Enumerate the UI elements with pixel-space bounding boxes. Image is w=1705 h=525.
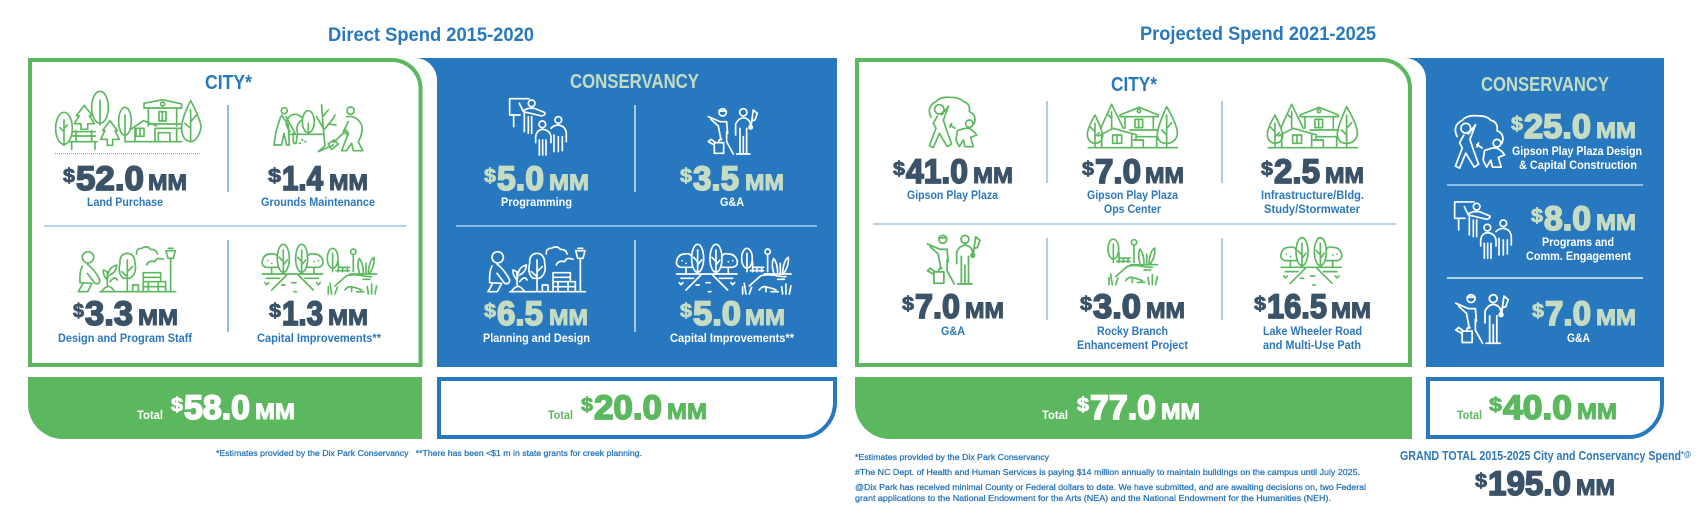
item: G&A bbox=[1456, 295, 1636, 345]
amount bbox=[680, 295, 785, 333]
item: play plaza design: & Capital Construction bbox=[1519, 158, 1637, 172]
footnotes: projected spend bbox=[855, 452, 1366, 503]
total bar: city 77.0: Total bbox=[1042, 408, 1068, 422]
amount: 8.0 bbox=[1544, 200, 1591, 238]
amount: $ bbox=[484, 166, 496, 187]
amount bbox=[484, 295, 588, 333]
amount: MM bbox=[1596, 118, 1636, 143]
amount: 1.3 bbox=[282, 295, 323, 333]
amount: $ bbox=[1254, 294, 1266, 315]
amount bbox=[1532, 295, 1636, 333]
icon: park land with house bbox=[55, 91, 201, 154]
item: G&A: G&A bbox=[720, 195, 744, 209]
icon: house and trees bbox=[1267, 104, 1357, 148]
item: programs and engagement bbox=[1455, 200, 1636, 263]
amount: $ bbox=[268, 166, 282, 187]
amount: MM bbox=[745, 305, 785, 330]
amount: 7.0 bbox=[915, 288, 960, 326]
footnotes: projected spend: @Dix Park has received minimal County or Federal dollars to date. We have submitted, and are awaiting decisions on, two Federal bbox=[855, 482, 1366, 492]
amount: $ bbox=[893, 159, 905, 180]
amount bbox=[484, 160, 589, 198]
total bar: conservancy 40.0 bbox=[1428, 379, 1662, 437]
icon: trees and creek bbox=[676, 244, 791, 294]
panel: direct spend city bbox=[30, 60, 420, 365]
item: planning and design: Planning and Design bbox=[483, 331, 590, 345]
amount: MM bbox=[1145, 163, 1184, 188]
icon: gardener with bench bbox=[488, 247, 585, 292]
item: Ops Center bbox=[1082, 104, 1184, 216]
amount: MM bbox=[138, 305, 178, 330]
amount bbox=[1531, 200, 1636, 238]
item: Lake Wheeler Road bbox=[1254, 238, 1371, 352]
amount: 3.0 bbox=[1093, 288, 1141, 326]
item: infrastructure study: Infrastructure/Bldg. bbox=[1261, 188, 1364, 202]
total bar: city 58.0: MM bbox=[255, 399, 295, 424]
amount bbox=[268, 160, 368, 198]
amount: $ bbox=[484, 301, 496, 322]
icon: teacher and students bbox=[1455, 202, 1511, 258]
total bar: conservancy 20.0: MM bbox=[667, 399, 707, 424]
icon: adult and child bbox=[929, 97, 977, 148]
heading: city: CITY* bbox=[205, 72, 252, 94]
item: infrastructure study bbox=[1261, 104, 1364, 216]
amount: $ bbox=[902, 294, 914, 315]
amount: MM bbox=[329, 170, 368, 195]
item: Rocky Branch: Rocky Branch bbox=[1097, 324, 1168, 338]
icon: two workers bbox=[1456, 295, 1508, 343]
amount: 3.5 bbox=[693, 160, 739, 198]
amount: 7.0 bbox=[1545, 295, 1591, 333]
total bar: city 77.0: MM bbox=[1161, 399, 1200, 424]
icon: two workers bbox=[927, 235, 980, 284]
amount: 16.5 bbox=[1267, 288, 1327, 326]
amount: MM bbox=[965, 298, 1004, 323]
amount: $ bbox=[1531, 206, 1543, 227]
icon: teacher and students bbox=[510, 99, 566, 155]
amount: 41.0 bbox=[906, 153, 968, 191]
icon: trees and creek bbox=[262, 244, 377, 294]
amount: $ bbox=[1261, 159, 1273, 180]
heading: city: CITY* bbox=[1111, 74, 1157, 96]
total bar: conservancy 40.0: $ bbox=[1489, 395, 1503, 416]
item: capital improvements bbox=[257, 244, 381, 345]
grand total: MM bbox=[1576, 475, 1615, 500]
icon: gardener with bench bbox=[78, 247, 176, 292]
total bar: city 58.0: 58.0 bbox=[184, 389, 250, 427]
item: programs and engagement: Comm. Engagement bbox=[1526, 249, 1631, 263]
amount bbox=[269, 295, 368, 333]
amount: $ bbox=[63, 166, 75, 187]
item: capital improvements: Capital Improvements** bbox=[670, 331, 794, 345]
amount bbox=[73, 295, 178, 333]
amount: MM bbox=[1146, 298, 1185, 323]
item: G&A bbox=[680, 109, 784, 209]
footnotes: projected spend: #The NC Dept. of Health and Human Services is paying $14 million annually to maintain buildings on the campus until July 2025. bbox=[855, 467, 1360, 477]
amount: MM bbox=[1331, 298, 1371, 323]
item: Lake Wheeler Road: and Multi-Use Path bbox=[1263, 338, 1361, 352]
total bar: city 77.0 bbox=[855, 377, 1412, 439]
grand total: $ bbox=[1475, 471, 1487, 492]
amount: 5.0 bbox=[693, 295, 741, 333]
total bar: conservancy 20.0: Total bbox=[548, 408, 573, 422]
item: planning and design bbox=[483, 247, 590, 345]
total bar: city 58.0 bbox=[28, 377, 422, 439]
heading: Direct Spend 2015-2020: Direct Spend 2015-2020 bbox=[328, 25, 534, 46]
amount: $ bbox=[680, 166, 692, 187]
item: Ops Center: Ops Center bbox=[1104, 202, 1161, 216]
item: capital improvements bbox=[670, 244, 794, 345]
item: Gipson Play Plaza bbox=[893, 97, 1013, 202]
amount: $ bbox=[1082, 159, 1094, 180]
amount bbox=[1080, 288, 1185, 326]
item: G&A: G&A bbox=[1567, 331, 1590, 345]
icon: creek bbox=[1108, 239, 1157, 285]
total bar: city 58.0: Total bbox=[137, 408, 163, 422]
amount: $ bbox=[269, 301, 281, 322]
item: programming bbox=[484, 99, 589, 209]
heading: conservancy: CONSERVANCY bbox=[1481, 74, 1610, 96]
item: grounds maintenance bbox=[261, 105, 375, 209]
amount: MM bbox=[1596, 305, 1636, 330]
panel: projected spend city bbox=[857, 60, 1410, 365]
amount: 1.4 bbox=[282, 160, 323, 198]
heading: Projected Spend 2021-2025: Projected Spend 2021-2025 bbox=[1140, 24, 1376, 45]
item: capital improvements: Capital Improvements** bbox=[257, 331, 381, 345]
item: Lake Wheeler Road: Lake Wheeler Road bbox=[1263, 324, 1362, 338]
item: programming: Programming bbox=[501, 195, 572, 209]
amount: 7.0 bbox=[1095, 153, 1141, 191]
icon: two workers bbox=[708, 109, 757, 154]
amount bbox=[893, 153, 1013, 191]
item: design and program staff: Design and Program Staff bbox=[58, 331, 193, 345]
amount: MM bbox=[549, 170, 589, 195]
amount bbox=[1261, 153, 1364, 191]
item: programs and engagement: Programs and bbox=[1542, 235, 1614, 249]
total bar: city 58.0: $ bbox=[171, 395, 183, 416]
item: Rocky Branch bbox=[1077, 239, 1188, 352]
amount: MM bbox=[1325, 163, 1364, 188]
total bar: conservancy 20.0: 20.0 bbox=[594, 389, 662, 427]
amount: MM bbox=[328, 305, 368, 330]
total bar: conservancy 40.0: 40.0 bbox=[1503, 389, 1572, 427]
item: play plaza design: Gipson Play Plaza Design bbox=[1512, 144, 1642, 158]
total bar: conservancy 20.0 bbox=[439, 379, 835, 437]
amount: $ bbox=[1511, 114, 1523, 135]
amount: 5.0 bbox=[497, 160, 544, 198]
amount bbox=[1082, 153, 1184, 191]
amount: 2.5 bbox=[1274, 153, 1320, 191]
amount bbox=[680, 160, 784, 198]
footnotes: projected spend: *Estimates provided by the Dix Park Conservancy bbox=[855, 452, 1050, 462]
amount: MM bbox=[549, 305, 588, 330]
amount: MM bbox=[148, 170, 187, 195]
amount: MM bbox=[745, 170, 784, 195]
icon: adult and child bbox=[1455, 116, 1505, 168]
panel: projected spend conservancy bbox=[1405, 58, 1664, 367]
icon: workers planting bbox=[274, 105, 363, 152]
amount: MM bbox=[973, 163, 1013, 188]
amount bbox=[1511, 108, 1636, 146]
total bar: conservancy 40.0: Total bbox=[1457, 408, 1482, 422]
amount: $ bbox=[1532, 301, 1544, 322]
item: play plaza design bbox=[1455, 108, 1642, 172]
item: design and program staff bbox=[58, 247, 193, 345]
total bar: city 77.0: $ bbox=[1077, 395, 1089, 416]
amount: 52.0 bbox=[76, 160, 144, 198]
item: grounds maintenance: Grounds Maintenance bbox=[261, 195, 375, 209]
amount bbox=[902, 288, 1004, 326]
item: G&A bbox=[902, 235, 1004, 338]
grand total: *@ bbox=[1681, 450, 1691, 459]
panel: direct spend conservancy bbox=[415, 58, 837, 367]
icon: house and trees bbox=[1087, 104, 1177, 148]
footnotes: projected spend: grant applications to the National Endowment for the Arts (NEA) and the National Endowment for the Humanities (NEH). bbox=[855, 493, 1331, 503]
total bar: conservancy 40.0: MM bbox=[1577, 399, 1617, 424]
amount: 25.0 bbox=[1524, 108, 1591, 146]
icon: tree-lined road bbox=[1281, 238, 1342, 285]
grand total bbox=[1400, 448, 1691, 503]
amount: $ bbox=[73, 301, 84, 322]
item: land purchase: Land Purchase bbox=[87, 195, 163, 209]
amount bbox=[1254, 288, 1371, 326]
amount: 3.3 bbox=[85, 295, 133, 333]
grand total: 195.0 bbox=[1488, 465, 1571, 503]
item: G&A: G&A bbox=[941, 324, 965, 338]
item: land purchase bbox=[55, 91, 201, 209]
amount bbox=[63, 160, 187, 198]
amount: $ bbox=[680, 301, 692, 322]
total bar: city 77.0: 77.0 bbox=[1090, 389, 1156, 427]
footnote: direct spend: *Estimates provided by the Dix Park Conservancy **There has been <$1 m in state grants for creek planning. bbox=[216, 448, 642, 458]
item: Rocky Branch: Enhancement Project bbox=[1077, 338, 1188, 352]
amount: 6.5 bbox=[497, 295, 543, 333]
item: Gipson Play Plaza: Gipson Play Plaza bbox=[907, 188, 998, 202]
item: infrastructure study: Study/Stormwater bbox=[1264, 202, 1360, 216]
amount: MM bbox=[1596, 210, 1636, 235]
heading: conservancy: CONSERVANCY bbox=[570, 71, 700, 93]
amount: $ bbox=[1080, 294, 1092, 315]
item: Ops Center: Gipson Play Plaza bbox=[1087, 188, 1178, 202]
total bar: conservancy 20.0: $ bbox=[581, 395, 593, 416]
